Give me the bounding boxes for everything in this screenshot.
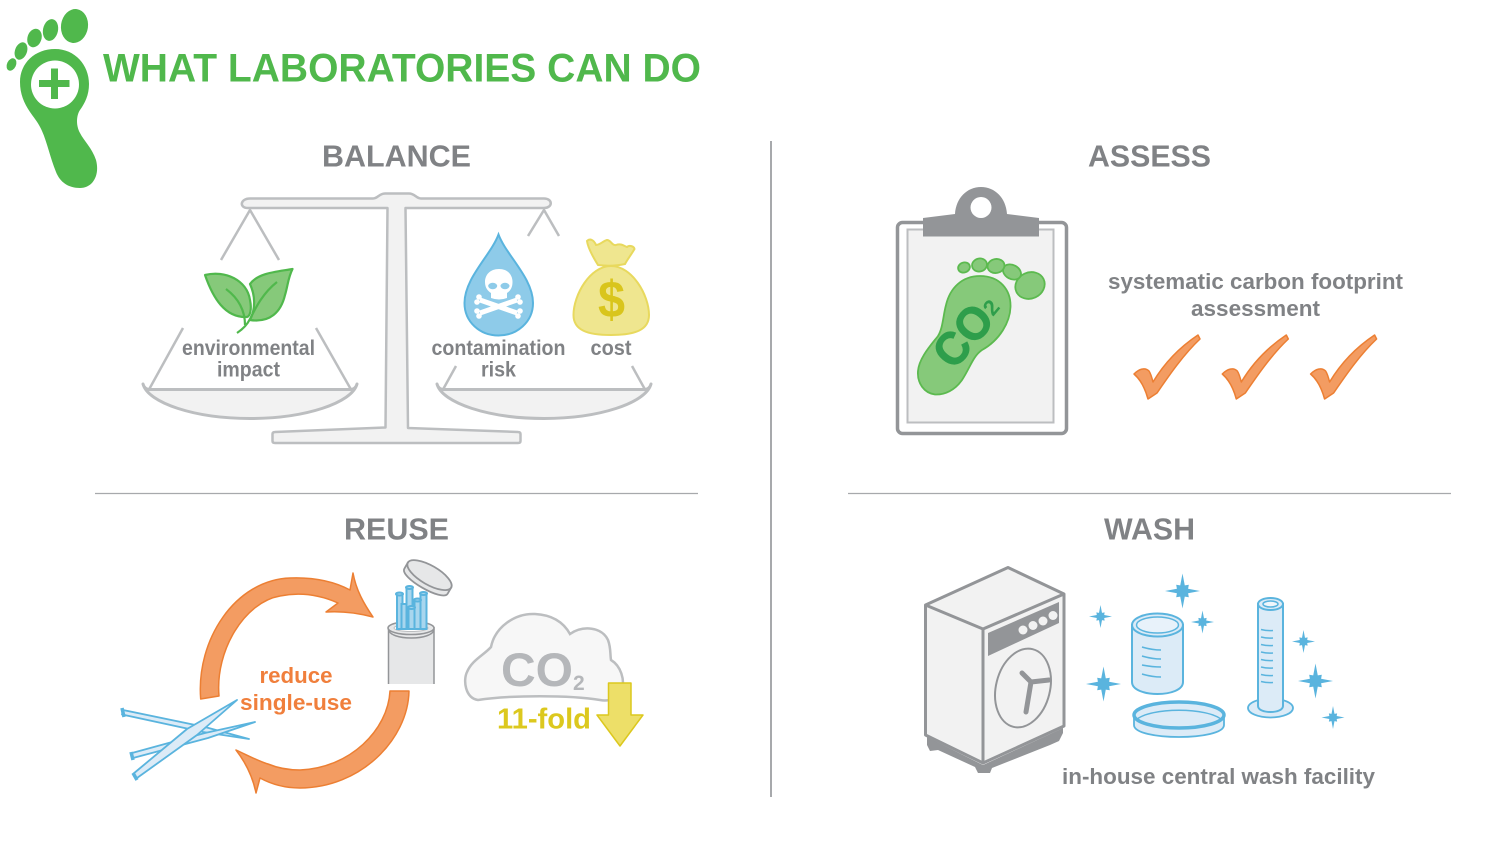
icon: beaker: [1132, 614, 1183, 694]
arrow: yellow down arrow: [597, 683, 643, 746]
label: in-house central wash facility: in-house central wash facility: [1062, 764, 1376, 789]
left pan: [143, 210, 357, 418]
icon: reusable glass tube jar: [388, 554, 456, 684]
icon: money bag: $: [598, 271, 625, 329]
label: environmental impact: impact: [217, 358, 280, 382]
right pan: [437, 210, 651, 418]
icon: disposable pipettes: [122, 700, 255, 780]
label: contamination risk: risk: [481, 358, 516, 382]
label: reduce single-use: single-use: [240, 690, 352, 715]
panel: assess: [898, 187, 1404, 434]
scale stand: [242, 194, 551, 443]
heading: balance: BALANCE: [322, 138, 471, 174]
icon: leaves: [205, 269, 292, 333]
label: 11-fold: 11-fold: [497, 704, 591, 736]
label: systematic carbon footprint assessment: assessment: [1191, 296, 1321, 321]
label: environmental impact: environmental: [182, 337, 315, 360]
icon: CO2 cloud: [465, 614, 623, 700]
title: WHAT LABORATORIES CAN DO: [103, 46, 701, 90]
heading: wash: WASH: [1104, 512, 1195, 546]
label: systematic carbon footprint assessment: [1108, 269, 1404, 321]
icon: contaminated water drop: [464, 234, 533, 336]
heading: assess: ASSESS: [1088, 138, 1211, 174]
panel: reuse: [122, 554, 643, 793]
label: reduce single-use: [240, 663, 352, 715]
label: cost: cost: [590, 337, 632, 360]
icon: washing machine: [926, 568, 1064, 773]
label: contamination risk: [432, 337, 566, 382]
label: contamination risk: contamination: [432, 337, 566, 360]
icon: petri dish: [1134, 702, 1224, 737]
icon: CO2 footprint: 2: [978, 295, 1005, 320]
icon: CO2 footprint: CO: [922, 293, 1004, 377]
icon: green footprint with plus: [5, 7, 97, 188]
icons: orange check marks: [1134, 335, 1377, 399]
icon: graduated cylinder: [1248, 598, 1293, 718]
arrow: top recycling arc: [200, 573, 373, 699]
icons: sparkles: [1086, 574, 1344, 729]
icon: money bag: [574, 240, 649, 335]
label: environmental impact: [182, 337, 315, 382]
icon: clipboard: [898, 187, 1066, 434]
icon: CO2 cloud: CO: [501, 643, 573, 696]
panel: balance scale: [143, 194, 651, 443]
icon: CO2 footprint: [918, 257, 1049, 395]
heading: reuse: REUSE: [344, 512, 449, 546]
label: systematic carbon footprint assessment: systematic carbon footprint: [1108, 269, 1404, 294]
panel: wash: [926, 568, 1376, 789]
icon: CO2 cloud: 2: [573, 672, 585, 695]
arrow: bottom recycling arc: [236, 691, 409, 793]
label: reduce single-use: reduce: [260, 663, 332, 688]
